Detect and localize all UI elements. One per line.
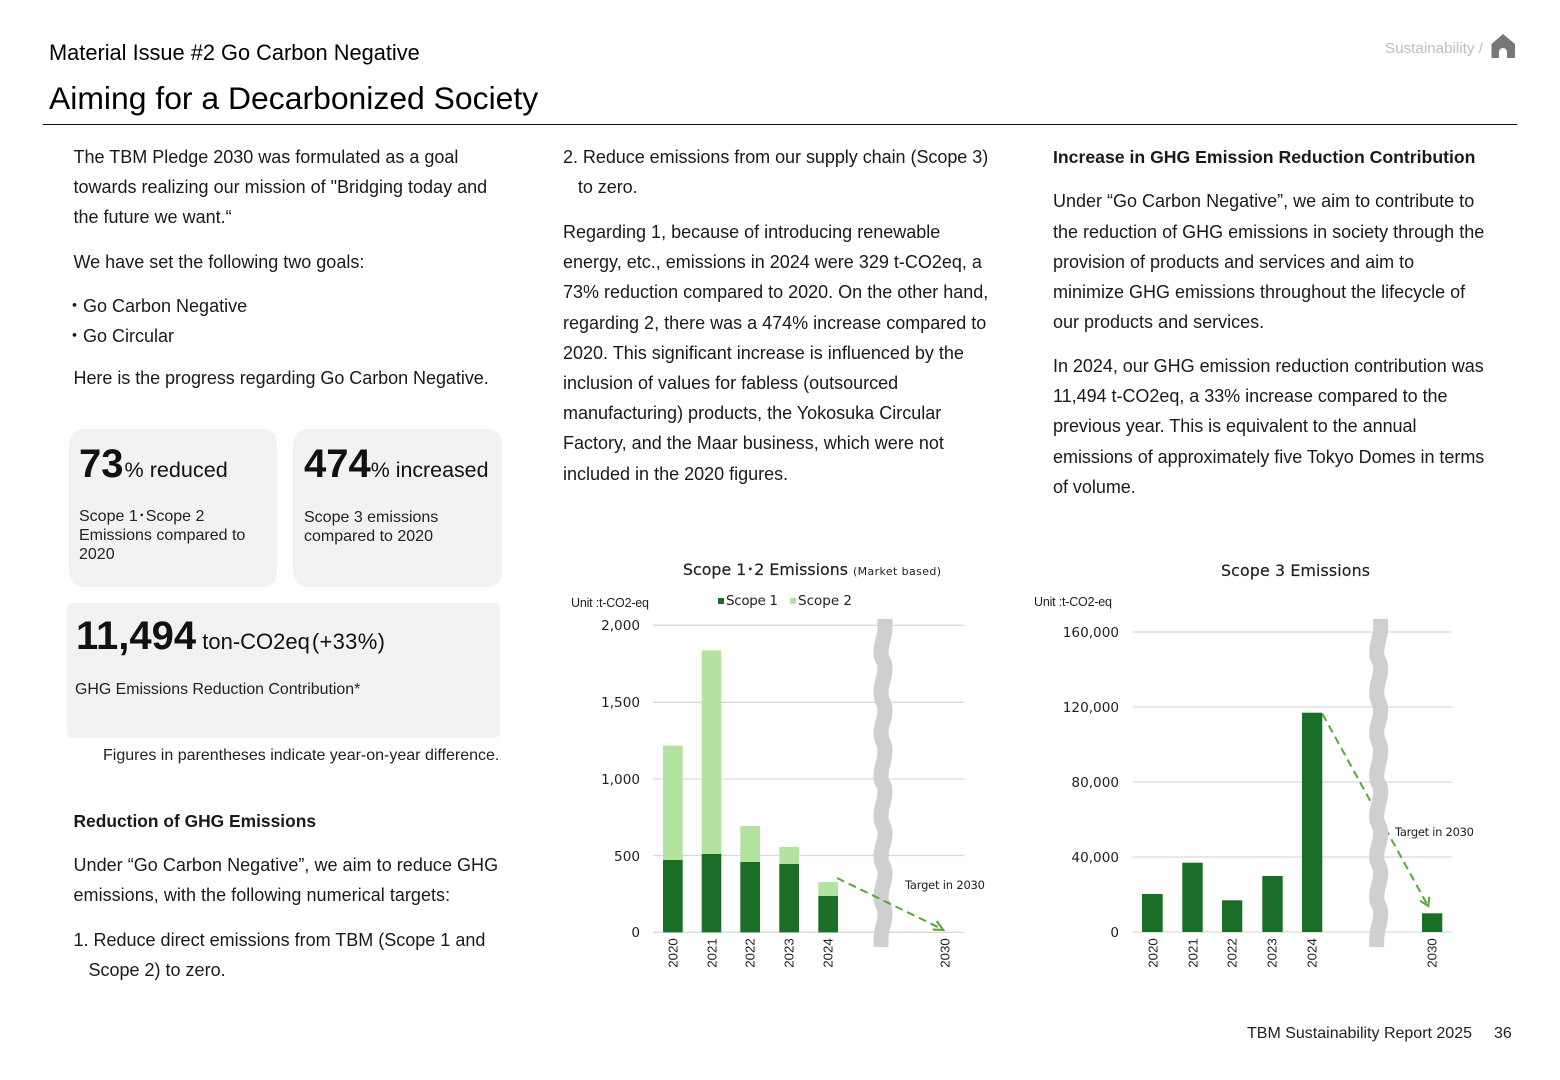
x axis labels: 2020	[666, 938, 681, 968]
text: target 2: 2. Reduce emissions from our supply chain (Scope 3)	[563, 147, 988, 167]
axis break	[1377, 619, 1381, 947]
unit label: Unit :t-CO2-eq	[1034, 595, 1112, 609]
text: goal list: ・Go Circular	[66, 326, 174, 346]
stacked bars	[663, 650, 838, 932]
chart title: Scope 3 Emissions	[1221, 561, 1370, 580]
heading: contribution: Increase in GHG Emission Reduction Contribution	[1053, 147, 1475, 167]
panel: 73% reduced	[69, 429, 277, 587]
text: progress explanation: 2020. This significant increase is influenced by the	[563, 343, 964, 363]
y axis labels	[1063, 625, 1119, 941]
text: progress explanation: energy, etc., emissions in 2024 were 329 t-CO2eq, a	[563, 252, 982, 272]
text: progress explanation: regarding 2, there was a 474% increase compared to	[563, 313, 986, 333]
caption: scope 3: Scope 3 emissions	[304, 509, 438, 526]
x axis labels: 2030	[938, 938, 953, 968]
text: progress explanation: Regarding 1, because of introducing renewable	[563, 222, 940, 242]
x axis labels: 2021	[705, 938, 720, 968]
chart title: (Market based)	[853, 565, 941, 578]
x axis labels: 2021	[1186, 938, 1201, 968]
x axis labels: 2020	[1146, 938, 1161, 968]
icon: home	[1492, 34, 1515, 58]
arrow: to 2030 target	[1322, 714, 1429, 906]
text: pledge intro	[74, 147, 487, 227]
text: target 2: to zero.	[578, 177, 638, 197]
y axis labels: 1,000	[601, 772, 640, 788]
y axis labels: 0	[631, 925, 640, 941]
stat: 474%: 474% increased	[304, 442, 488, 486]
heading: reduction of GHG emissions: Reduction of GHG Emissions	[74, 811, 316, 831]
arrow: to 2030 target	[837, 878, 943, 930]
text: contribution 2024: of volume.	[1053, 477, 1136, 497]
text: progress explanation: included in the 2020 figures.	[563, 464, 788, 484]
stat: 73%: 73% reduced	[79, 442, 228, 486]
text: pledge intro: the future we want.“	[74, 207, 232, 227]
text: contribution 2024: In 2024, our GHG emission reduction contribution was	[1053, 356, 1484, 376]
x axis labels: 2022	[1225, 938, 1240, 968]
stat: 11,494: 11,494 ton-CO2eq(+33%)	[76, 614, 385, 658]
label: target in 2030: Target in 2030	[1394, 825, 1474, 839]
legend: Scope 2	[798, 593, 852, 609]
x axis labels: 2023	[1265, 938, 1280, 968]
caption: scope 1 and 2	[79, 508, 245, 563]
axis break	[881, 619, 885, 947]
breadcrumb: Sustainability /	[1385, 40, 1483, 57]
text: progress explanation: inclusion of values for fabless (outsourced	[563, 373, 898, 393]
x axis labels: 2024	[821, 938, 836, 968]
text: target 1: 1. Reduce direct emissions from TBM (Scope 1 and	[74, 930, 485, 950]
text: contribution aim	[1053, 191, 1484, 332]
text: pledge intro: The TBM Pledge 2030 was formulated as a goal	[74, 147, 458, 167]
y axis labels: 2,000	[601, 618, 640, 634]
legend	[718, 593, 852, 609]
text: goal list	[66, 296, 247, 346]
text: target 1: Scope 2) to zero.	[88, 960, 226, 980]
text: progress explanation: manufacturing) products, the Yokosuka Circular	[563, 403, 941, 423]
legend: Scope 1	[726, 593, 778, 609]
text: progress explanation	[563, 222, 988, 484]
x axis labels: 2022	[743, 938, 758, 968]
x axis labels: 2023	[782, 938, 797, 968]
text: contribution aim: our products and services.	[1053, 312, 1264, 332]
text: goal list: ・Go Carbon Negative	[66, 296, 247, 316]
y axis labels: 120,000	[1063, 700, 1119, 716]
page number: 36	[1494, 1025, 1512, 1042]
y axis labels: 80,000	[1071, 775, 1119, 791]
text: targets intro	[74, 855, 498, 905]
caption: scope 1 and 2: Scope 1･Scope 2	[79, 508, 204, 525]
y axis labels	[601, 618, 640, 941]
text: target 2	[563, 147, 988, 197]
text: contribution 2024: previous year. This is equivalent to the annual	[1053, 416, 1416, 436]
text: contribution aim: the reduction of GHG emissions in society through the	[1053, 222, 1484, 242]
text: progress explanation: Factory, and the Maar business, which were not	[563, 433, 944, 453]
text: targets intro: emissions, with the following numerical targets:	[74, 885, 450, 905]
text: pledge intro: towards realizing our mission of "Bridging today and	[74, 177, 487, 197]
unit label: Unit :t-CO2-eq	[571, 596, 649, 610]
note: Figures in parentheses indicate year-on-year difference.	[103, 747, 499, 764]
caption: scope 1 and 2: Emissions compared to	[79, 527, 245, 544]
text: contribution 2024	[1053, 356, 1484, 497]
subtitle: Material Issue #2 Go Carbon Negative	[49, 40, 420, 65]
text: contribution 2024: 11,494 t-CO2eq, a 33% increase compared to the	[1053, 386, 1448, 406]
text: contribution 2024: emissions of approximately five Tokyo Domes in terms	[1053, 447, 1484, 467]
text: target 1	[74, 930, 485, 980]
y axis labels: 1,500	[601, 695, 640, 711]
bars	[1142, 713, 1442, 932]
y axis labels: 160,000	[1063, 625, 1119, 641]
text: targets intro: Under “Go Carbon Negative”, we aim to reduce GHG	[74, 855, 498, 875]
footer: TBM Sustainability Report 2025	[1247, 1025, 1472, 1042]
text: progress intro: Here is the progress regarding Go Carbon Negative.	[74, 368, 489, 388]
panel: reduction contribution	[67, 603, 500, 738]
y axis labels: 40,000	[1071, 850, 1119, 866]
chart title: Scope 1･2 Emissions	[683, 560, 848, 579]
text: two goals: We have set the following two goals:	[74, 252, 364, 272]
title: Aiming for a Decarbonized Society	[49, 80, 538, 116]
x axis labels	[1146, 938, 1440, 968]
x axis labels	[666, 938, 953, 968]
text: contribution aim: provision of products and services and aim to	[1053, 252, 1414, 272]
caption: scope 1 and 2: 2020	[79, 546, 115, 563]
x axis labels: 2024	[1305, 938, 1320, 968]
caption: contribution: GHG Emissions Reduction Contribution*	[75, 681, 360, 698]
label: target in 2030: Target in 2030	[904, 878, 985, 892]
caption: scope 3: compared to 2020	[304, 528, 433, 545]
chart title	[683, 560, 941, 579]
text: progress explanation: 73% reduction compared to 2020. On the other hand,	[563, 282, 988, 302]
text: contribution aim: Under “Go Carbon Negative”, we aim to contribute to	[1053, 191, 1474, 211]
panel: 474% increased	[293, 429, 502, 587]
x axis labels: 2030	[1425, 938, 1440, 968]
caption: scope 3	[304, 509, 438, 545]
y axis labels: 500	[614, 849, 640, 865]
y axis labels: 0	[1110, 925, 1119, 941]
text: contribution aim: minimize GHG emissions throughout the lifecycle of	[1053, 282, 1465, 302]
